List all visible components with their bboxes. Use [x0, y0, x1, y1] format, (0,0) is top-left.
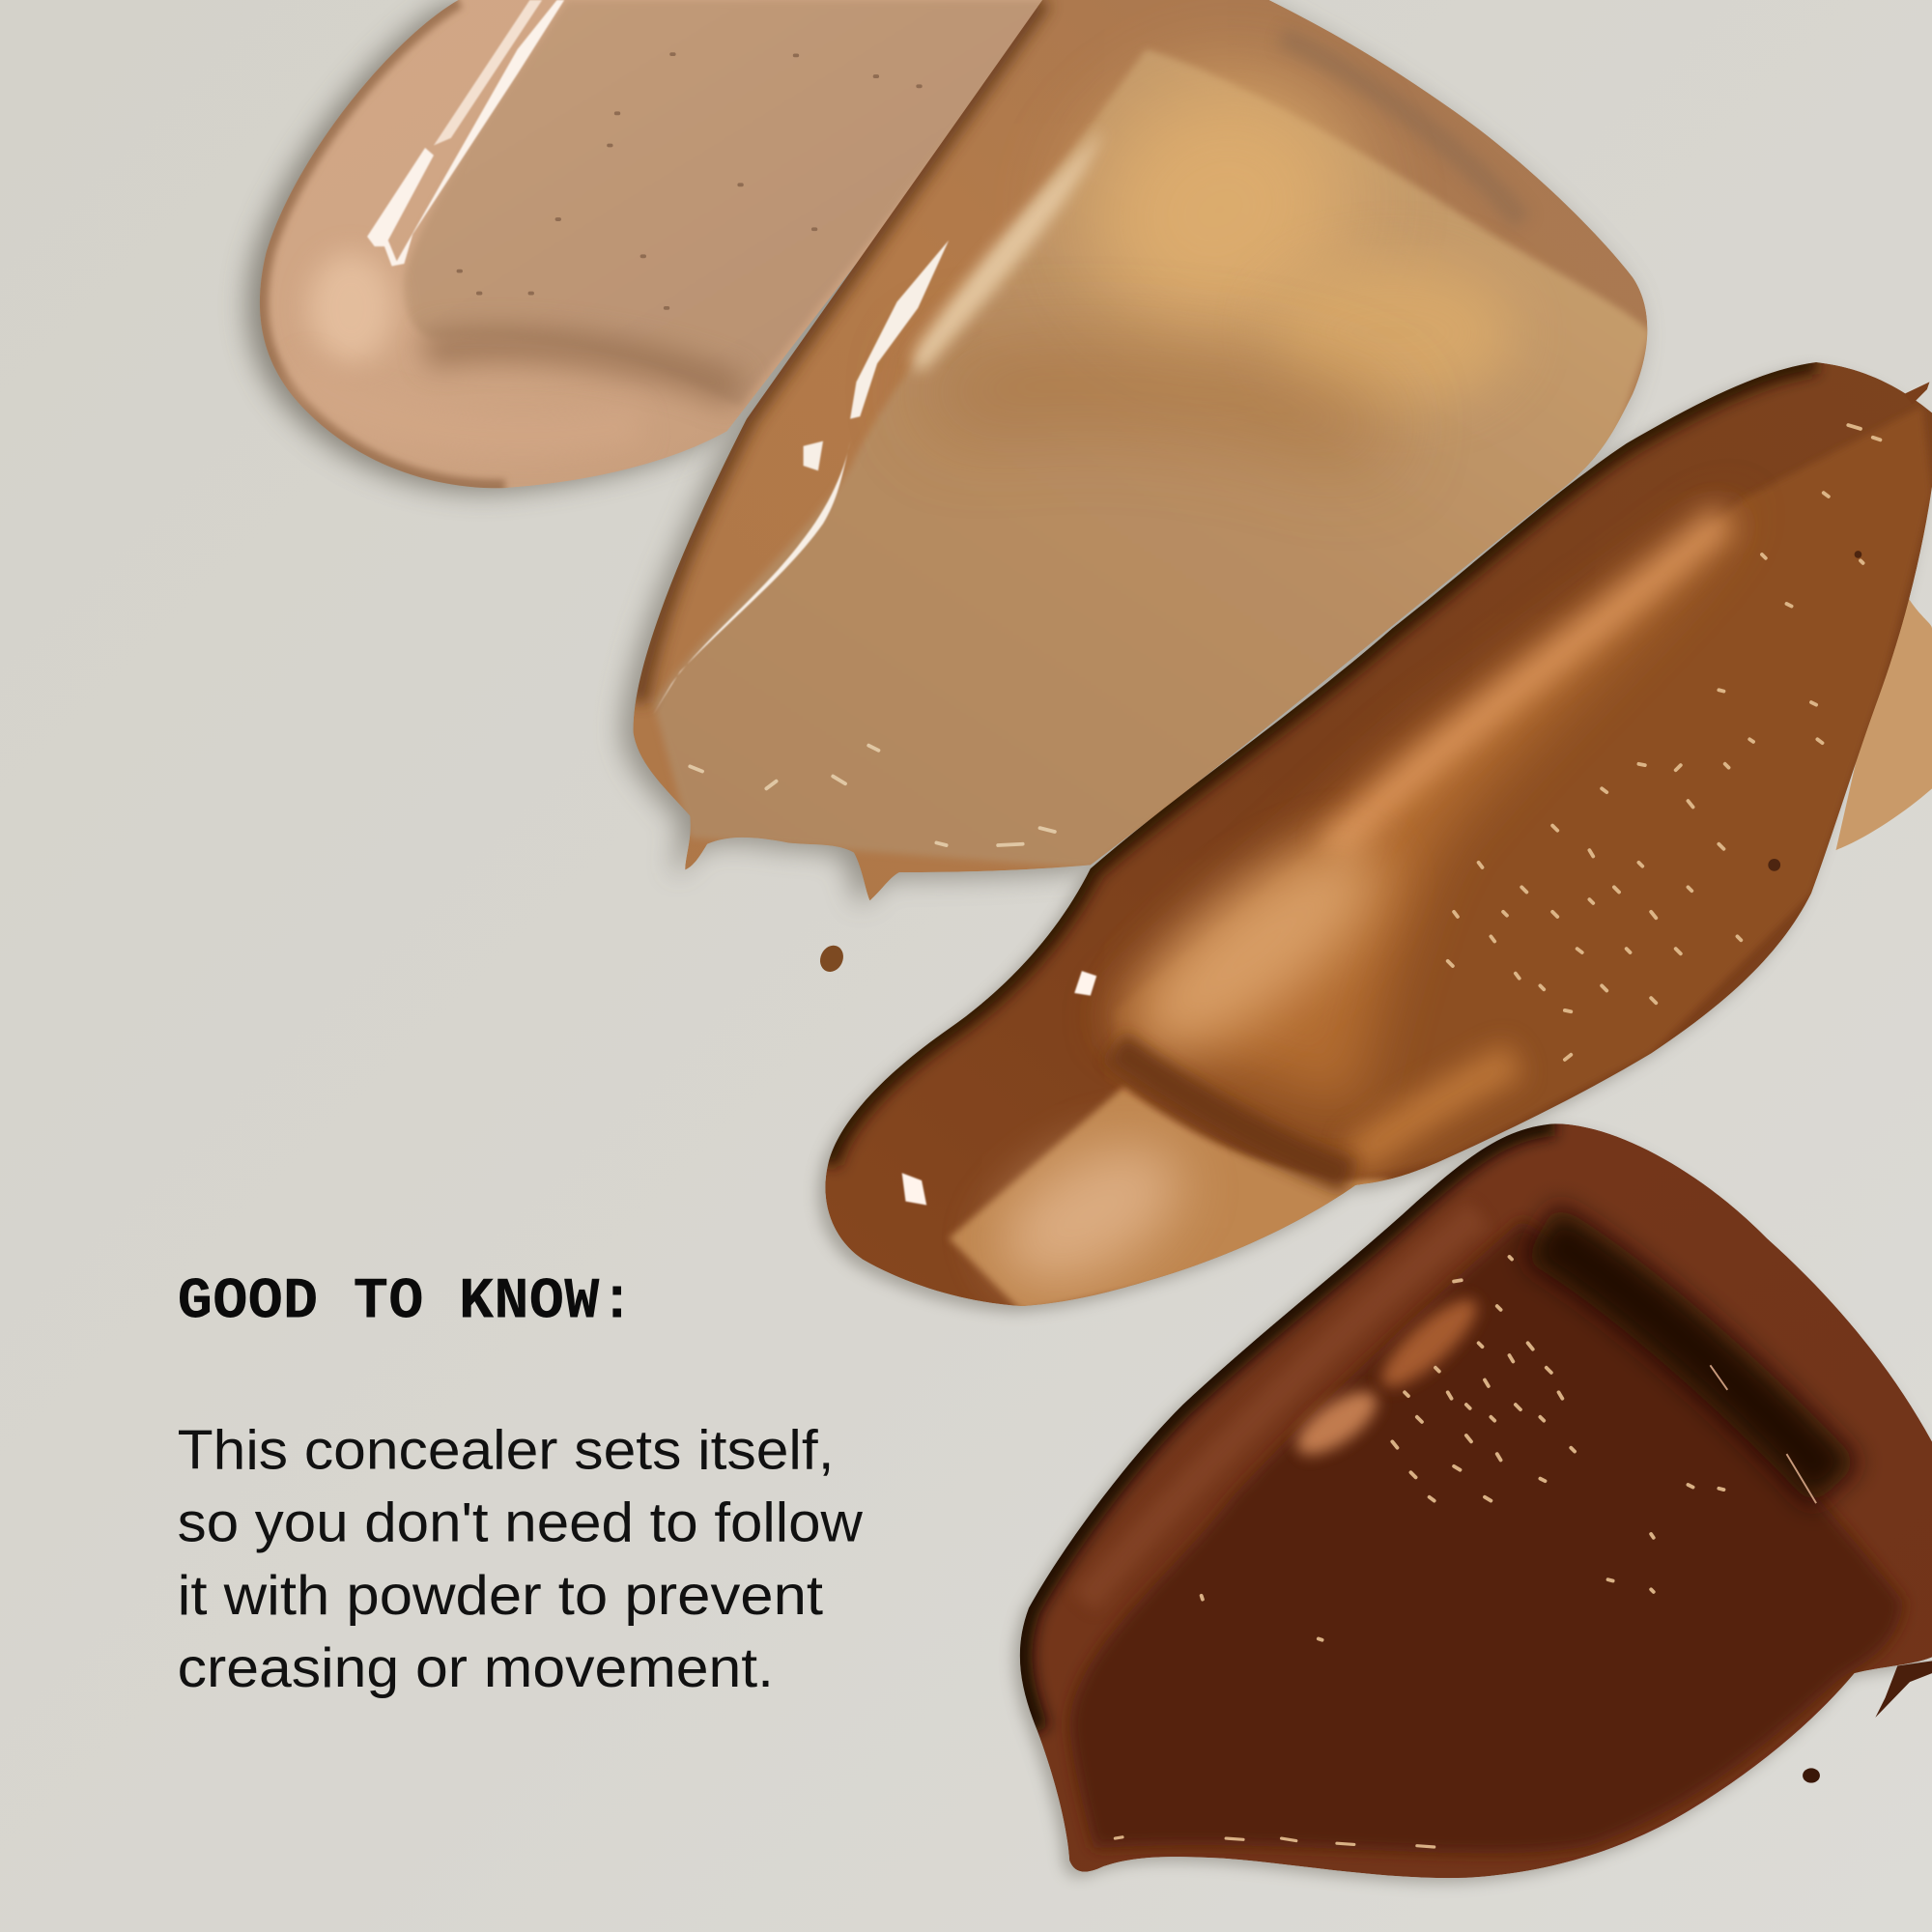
body text: it with powder to prevent	[178, 1565, 823, 1627]
heading: GOOD TO KNOW:	[178, 1270, 635, 1336]
swatch 1: light beige	[260, 0, 1060, 488]
swatch 2: medium tan	[634, 0, 1651, 900]
body text	[178, 1419, 863, 1699]
body text: This concealer sets itself,	[178, 1419, 835, 1481]
gloss highlight	[367, 0, 564, 267]
pale flecks	[690, 746, 1055, 845]
surface pores	[458, 54, 921, 308]
gloss highlight	[653, 241, 949, 715]
pale ridge highlight	[913, 129, 1103, 371]
paint drips and drops	[816, 382, 1932, 1783]
swatch 4: deep brown	[1020, 1123, 1932, 1878]
body text: so you don't need to follow	[178, 1492, 863, 1554]
tan patch at right edge	[1836, 579, 1932, 850]
lower tan block	[949, 1087, 1392, 1312]
swatch 3: chestnut	[825, 362, 1932, 1312]
inner flat area	[1115, 407, 1932, 1180]
body text: creasing or movement.	[178, 1637, 774, 1699]
dark band	[1540, 1233, 1836, 1485]
bronze glints	[1288, 1380, 1386, 1466]
gloss highlight	[902, 971, 1096, 1205]
speckled texture	[1202, 1257, 1723, 1640]
speckled texture	[1448, 425, 1880, 1060]
inner flat area	[1069, 1220, 1904, 1853]
